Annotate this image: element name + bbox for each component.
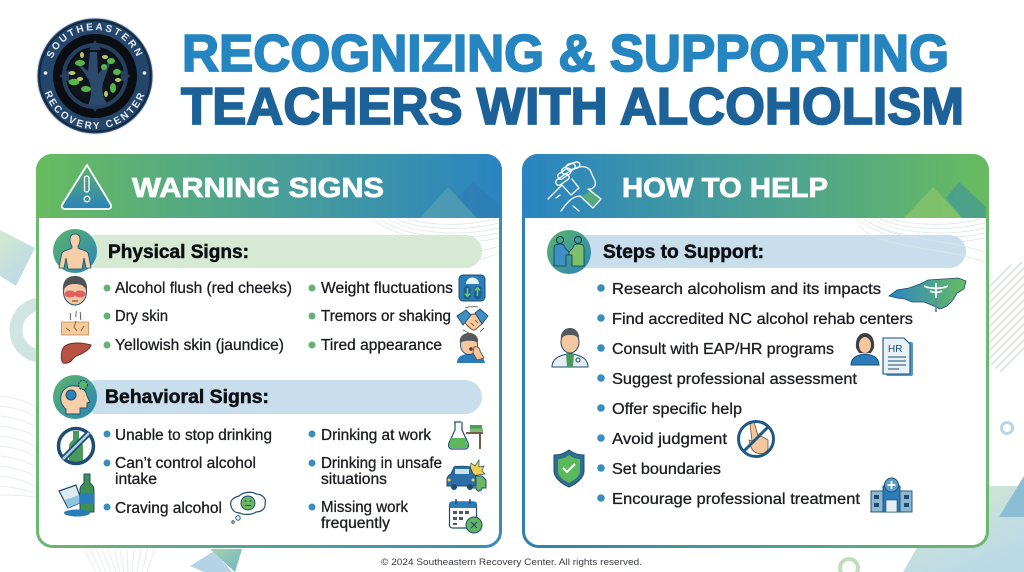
bullet list: steps to support: Offer specific help bbox=[612, 401, 742, 418]
bullet list: steps to support bbox=[597, 281, 913, 508]
logo: Southeastern Recovery Center: SOUTHEASTERN bbox=[47, 23, 143, 58]
bullet list: physical signs bbox=[104, 280, 453, 354]
bullet list: physical signs: Tired appearance bbox=[321, 337, 442, 354]
heading: steps to support: Steps to Support: bbox=[603, 242, 764, 263]
icon: calendar with x bbox=[450, 499, 482, 533]
icon: body bbox=[53, 229, 97, 273]
bullet list: steps to support: Set boundaries bbox=[612, 461, 721, 478]
background decorations bbox=[0, 226, 1024, 572]
bullet list: steps to support: Find accredited NC alcohol rehab centers bbox=[612, 311, 913, 328]
section: physical signs bbox=[53, 229, 488, 363]
bullet list: physical signs: Yellowish skin (jaundice) bbox=[115, 337, 284, 354]
heading: warning signs: WARNING SIGNS bbox=[132, 172, 384, 203]
bullet list: physical signs: Alcohol flush (red cheeks) bbox=[115, 280, 292, 297]
icon: doctor bbox=[552, 328, 588, 367]
icon: head with gears bbox=[53, 375, 97, 419]
title: TEACHERS WITH ALCOHOLISM bbox=[181, 78, 964, 136]
bullet list: physical signs: Weight fluctuations bbox=[321, 280, 453, 297]
icon: warning triangle bbox=[62, 165, 111, 209]
logo: Southeastern Recovery Center: RECOVERY CENTER bbox=[44, 90, 144, 129]
bullet list: physical signs: Dry skin bbox=[115, 308, 168, 325]
bullet list: behavioral signs: Drinking at work bbox=[321, 427, 431, 444]
section: behavioral signs bbox=[53, 375, 486, 533]
icon: flask at desk bbox=[449, 422, 483, 449]
bullet list: behavioral signs: intake bbox=[115, 471, 157, 488]
bullet list: steps to support: Encourage professional treatment bbox=[612, 491, 861, 508]
icon: two people bbox=[547, 230, 591, 274]
icon: HR woman bbox=[851, 333, 879, 365]
icon: shield check bbox=[554, 450, 584, 487]
icon: shaking hands bbox=[457, 307, 488, 334]
icon: dry skin bbox=[62, 311, 88, 335]
icon: spilled bottle bbox=[59, 474, 94, 516]
icon: North Carolina map with caduceus bbox=[889, 278, 966, 312]
heading: behavioral signs: Behavioral Signs: bbox=[105, 387, 269, 408]
panel: how to help bbox=[522, 154, 989, 546]
panel: warning signs bbox=[36, 154, 502, 546]
heading: how to help: HOW TO HELP bbox=[622, 172, 828, 203]
bullet list: steps to support: Suggest professional assessment bbox=[612, 371, 858, 388]
section: steps to support bbox=[547, 222, 985, 512]
heading: physical signs: Physical Signs: bbox=[108, 242, 249, 263]
bullet list: behavioral signs: Craving alcohol bbox=[115, 500, 222, 517]
bullet list: steps to support: Research alcoholism and its impacts bbox=[612, 281, 881, 298]
bullet list: behavioral signs: situations bbox=[321, 471, 387, 488]
bullet list: physical signs: Tremors or shaking bbox=[321, 308, 451, 325]
bullet list: behavioral signs: Can’t control alcohol bbox=[115, 455, 256, 472]
bullet list: behavioral signs: Drinking in unsafe bbox=[321, 455, 442, 472]
title bbox=[181, 25, 964, 136]
icon: no pointing finger bbox=[738, 422, 774, 456]
bullet list: steps to support: Consult with EAP/HR programs bbox=[612, 341, 834, 358]
bullet list: behavioral signs bbox=[104, 427, 442, 532]
bullet list: behavioral signs: frequently bbox=[321, 515, 390, 532]
bullet list: behavioral signs: Unable to stop drinking bbox=[115, 427, 272, 444]
icon: HR document bbox=[883, 338, 913, 376]
icon: thought bubble bbox=[231, 492, 265, 523]
icon: hospital bbox=[871, 478, 912, 512]
footer: © 2024 Southeastern Recovery Center. All rights reserved. bbox=[381, 557, 642, 568]
icon: liver bbox=[61, 343, 91, 363]
icon: flushed face bbox=[63, 276, 87, 305]
icon: HR document: HR bbox=[888, 344, 902, 355]
icon: car crash bbox=[447, 460, 486, 491]
icon: tired person bbox=[457, 333, 485, 363]
icon: weight scale bbox=[459, 275, 485, 301]
icon: no alcohol bbox=[58, 428, 94, 464]
title: RECOGNIZING & SUPPORTING bbox=[182, 25, 949, 83]
bullet list: behavioral signs: Missing work bbox=[321, 499, 408, 516]
icon: clasped hands bbox=[548, 161, 602, 211]
bullet list: steps to support: Avoid judgment bbox=[612, 431, 728, 448]
logo: Southeastern Recovery Center bbox=[36, 18, 154, 134]
